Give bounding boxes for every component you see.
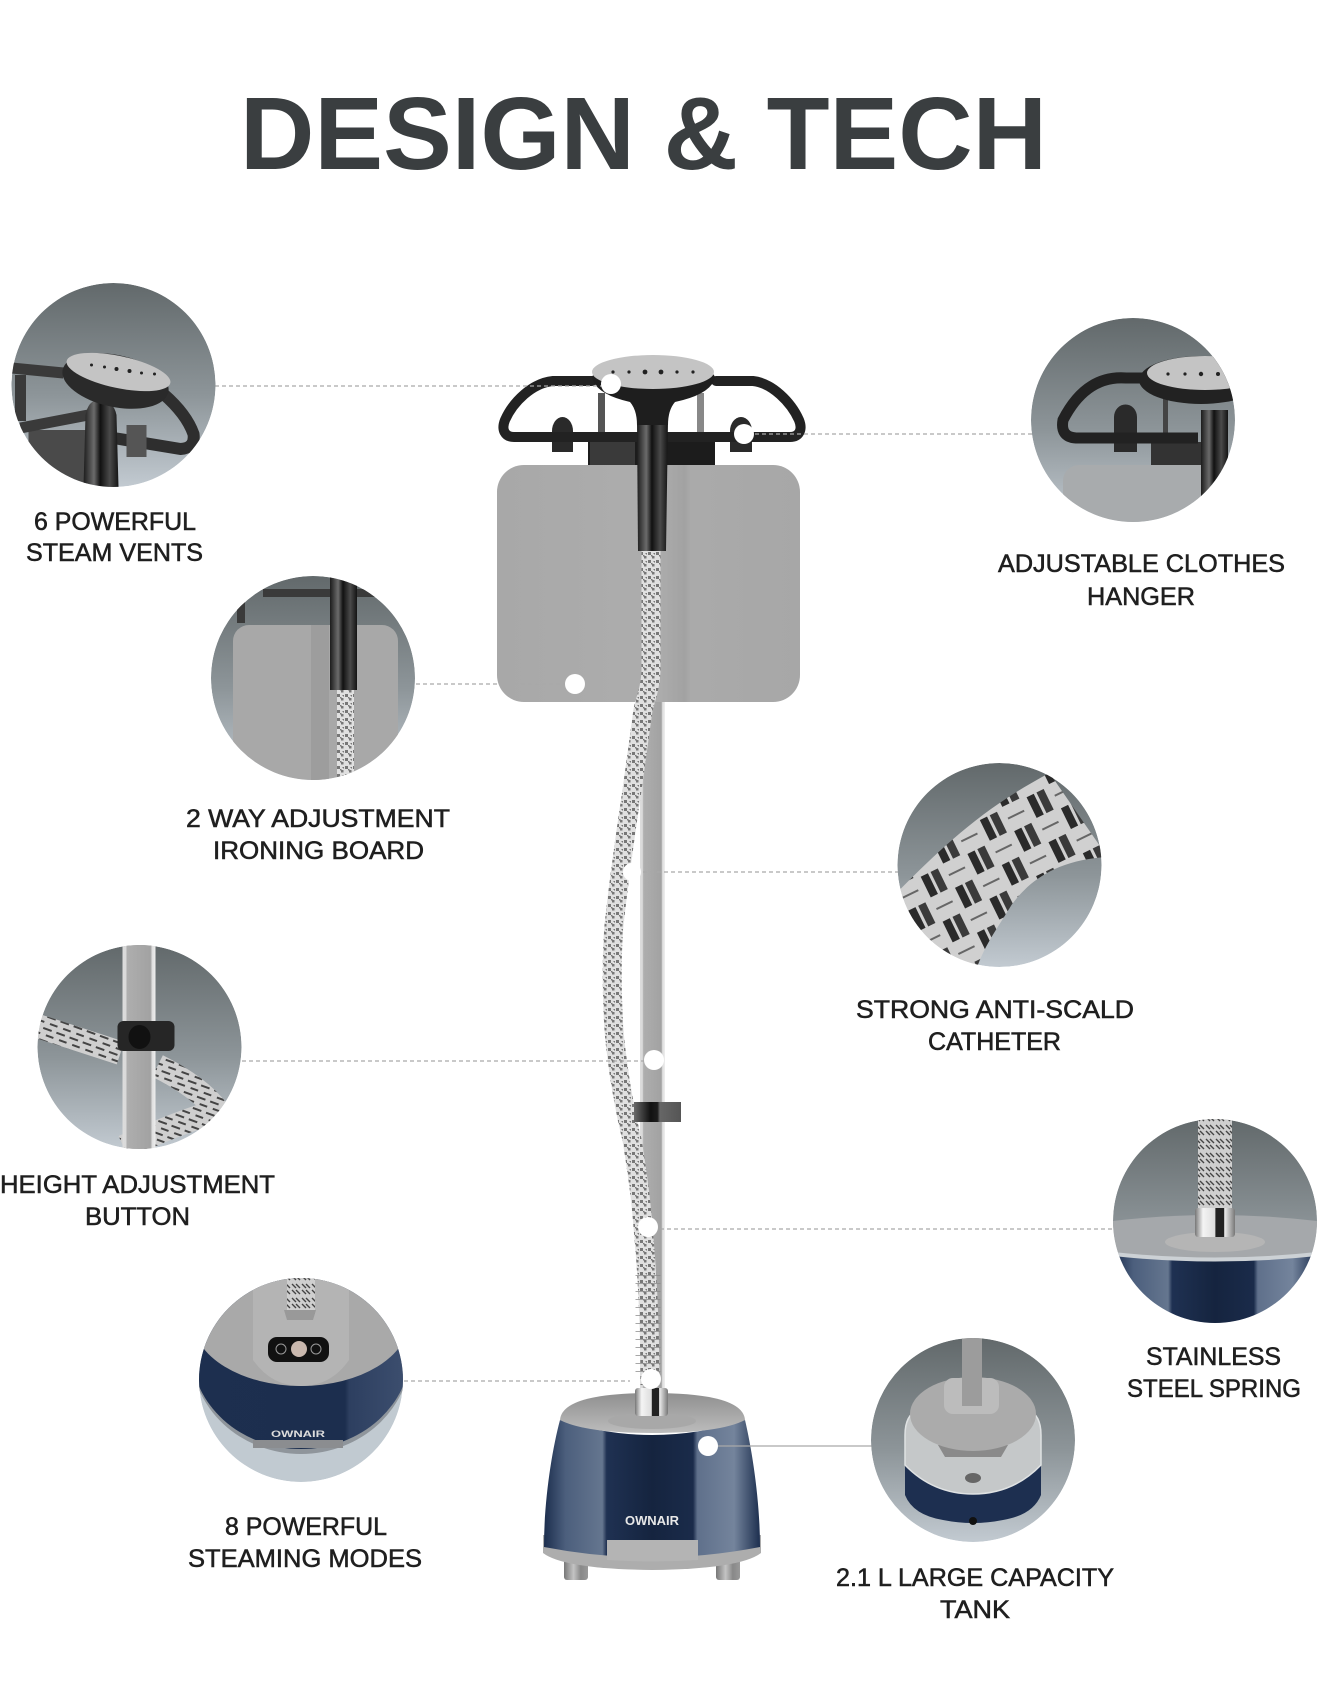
label: steaming modes: 8 POWERFUL [225, 1513, 387, 1541]
product: garment steamer [497, 355, 801, 1580]
label: anti-scald catheter: STRONG ANTI-SCALD [856, 996, 1134, 1024]
panel: ironing board [211, 576, 415, 785]
hose clip [634, 1102, 681, 1122]
label: anti-scald catheter: CATHETER [928, 1028, 1061, 1056]
label: height adjustment: HEIGHT ADJUSTMENT [0, 1171, 275, 1199]
steamer pole [640, 690, 665, 1390]
label: ironing board [186, 805, 450, 865]
panel: height adjustment [38, 945, 242, 1149]
callout markers [565, 374, 754, 1456]
label: steaming modes [188, 1513, 422, 1573]
ironing board [497, 465, 800, 702]
panel: steaming modes [199, 1278, 403, 1482]
label: steaming modes: STEAMING MODES [188, 1545, 422, 1573]
label: stainless spring: STEEL SPRING [1127, 1375, 1301, 1403]
label: anti-scald catheter [856, 996, 1134, 1056]
title: DESIGN & TECH [240, 76, 1047, 191]
panel: steaming modes: OWNAIR [271, 1429, 326, 1439]
panel: steam vents [12, 283, 216, 487]
steam head [592, 355, 715, 551]
label: steam vents: STEAM VENTS [26, 539, 203, 567]
spring ticks [636, 1275, 660, 1375]
clothes hanger handles [503, 381, 801, 437]
steamer base [543, 1388, 761, 1580]
label: ironing board: 2 WAY ADJUSTMENT [186, 805, 450, 833]
label: water tank [836, 1564, 1114, 1624]
panel: anti-scald catheter [894, 763, 1108, 969]
label: height adjustment [0, 1171, 275, 1231]
label: steam vents: 6 POWERFUL [34, 508, 196, 536]
panel: stainless spring [1113, 1119, 1317, 1323]
leader lines [215, 386, 1114, 1446]
label: stainless spring: STAINLESS [1146, 1343, 1281, 1371]
label: height adjustment: BUTTON [85, 1203, 190, 1231]
label: steam vents [26, 508, 203, 567]
label: clothes hanger: ADJUSTABLE CLOTHES [998, 550, 1285, 578]
steam hose [612, 548, 651, 1385]
label: clothes hanger: HANGER [1087, 583, 1195, 611]
logo: OWNAIR [625, 1513, 680, 1528]
hanger clips [552, 417, 752, 452]
label: water tank: TANK [940, 1596, 1010, 1624]
panel: water tank [871, 1338, 1075, 1542]
panel: clothes hanger [1031, 318, 1235, 522]
label: stainless spring [1127, 1343, 1301, 1403]
tank post block [588, 393, 715, 466]
label: water tank: 2.1 L LARGE CAPACITY [836, 1564, 1114, 1592]
label: clothes hanger [998, 550, 1285, 611]
label: ironing board: IRONING BOARD [213, 837, 424, 865]
